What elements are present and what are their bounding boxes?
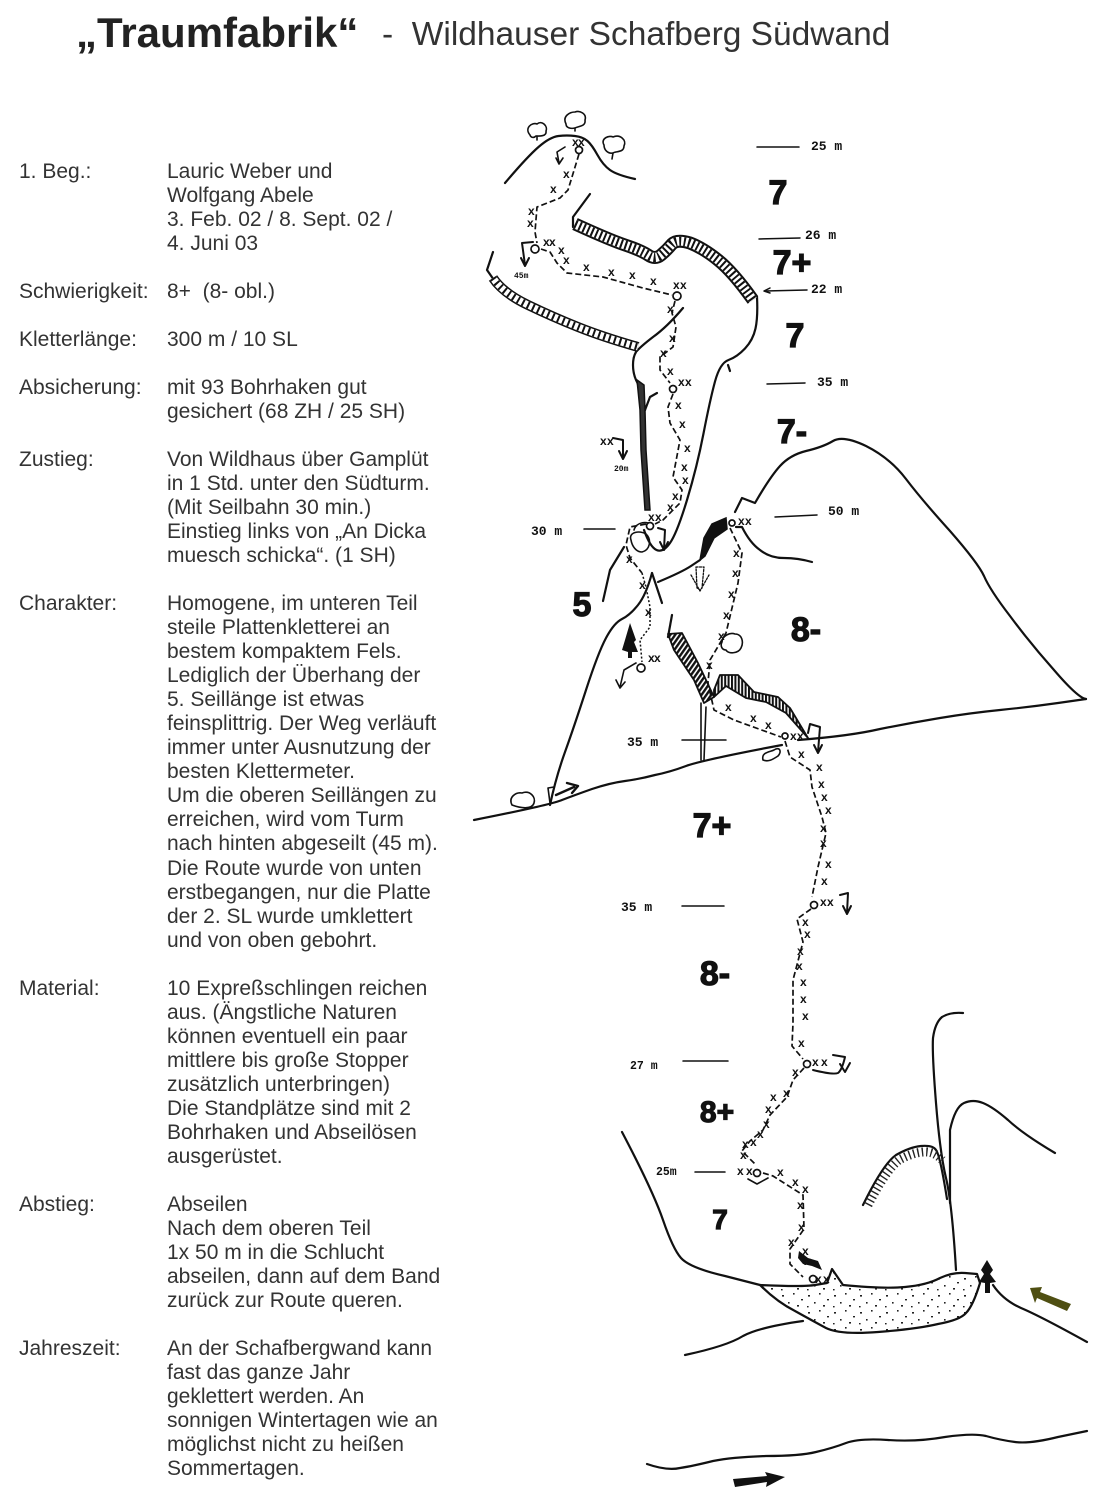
- bolts: xxxxxxxxx: [740, 1065, 799, 1162]
- bolts: xxxxxxxxxxxxxxxxxxxxx: [527, 167, 691, 514]
- text block: material: mittlere bis große Stopper: [167, 1049, 409, 1072]
- middle mountain and ledge: [474, 439, 1086, 820]
- text block: first ascent: Wolfgang Abele: [167, 184, 314, 207]
- text block: approach: [19, 448, 430, 567]
- text block: character: der 2. SL wurde umklettert: [167, 905, 412, 928]
- arrow: approach direction: [1030, 1287, 1071, 1311]
- text block: protection: Absicherung:: [19, 376, 142, 399]
- belays: [531, 146, 818, 1282]
- text block: descent: Nach dem oberen Teil: [167, 1217, 371, 1240]
- text block: character: nach hinten abgeseilt (45 m).: [167, 832, 438, 855]
- trees: [622, 623, 996, 1293]
- difficulty grades: 7: [786, 317, 804, 355]
- overhang bands, hatched: [493, 224, 753, 347]
- upper rock outlines: [487, 136, 757, 601]
- text block: season: Sommertagen.: [167, 1457, 305, 1480]
- dotted approach: [640, 573, 650, 662]
- lower wall outlines: [622, 1013, 1087, 1469]
- text block: character: immer unter Ausnutzung der: [167, 736, 431, 759]
- pitch length labels: 25 m: [811, 139, 842, 154]
- text block: character: feinsplittrig. Der Weg verläuft: [167, 712, 436, 735]
- lower overhang, hatched: [668, 633, 808, 738]
- text block: character: Um die oberen Seillängen zu: [167, 784, 437, 807]
- text block: approach: Zustieg:: [19, 448, 94, 471]
- bolts: xxxxxxxxxxxxx: [543, 135, 827, 1286]
- text block: character: [19, 592, 438, 952]
- text block: descent: [19, 1193, 440, 1312]
- text block: material: Bohrhaken und Abseilösen: [167, 1121, 417, 1144]
- text block: first ascent: 1. Beg.:: [19, 160, 91, 183]
- bolts: xxxxxxxxx: [798, 747, 832, 888]
- pitch length labels: 35 m: [621, 900, 652, 915]
- text block: character: steile Plattenkletterei an: [167, 616, 390, 639]
- text block: descent: abseilen, dann auf dem Band: [167, 1265, 440, 1288]
- text block: character: erstbegangen, nur die Platte: [167, 881, 431, 904]
- text block: protection: [19, 376, 405, 423]
- text block: difficulty: 8+ (8- obl.): [167, 280, 275, 303]
- summit bushes: [528, 111, 625, 159]
- difficulty grades: 8-: [700, 955, 730, 993]
- text block: first ascent: [19, 160, 392, 255]
- pitch length labels: 35 m: [817, 375, 848, 390]
- difficulty grades: 8-: [791, 611, 821, 649]
- text block: difficulty: Schwierigkeit:: [19, 280, 149, 303]
- text block: character: Lediglich der Überhang der: [167, 664, 420, 687]
- text block: difficulty: [19, 280, 275, 303]
- difficulty grades: 7+: [693, 807, 731, 845]
- bushes: [511, 523, 780, 808]
- text block: approach: (Mit Seilbahn 30 min.): [167, 496, 371, 519]
- text block: season: Jahreszeit:: [19, 1337, 121, 1360]
- black overhang at fifty metre belay: [700, 518, 727, 560]
- text block: first ascent: Lauric Weber und: [167, 160, 332, 183]
- pitch length labels: 26 m: [805, 228, 836, 243]
- text block: character: bestem kompaktem Fels.: [167, 640, 402, 663]
- text block: descent: zurück zur Route queren.: [167, 1289, 403, 1312]
- text block: climbing length: [19, 328, 298, 351]
- text block: material: 10 Expreßschlingen reichen: [167, 977, 427, 1000]
- subtitle: - Wildhauser Schafberg Südwand: [382, 16, 890, 53]
- bolts: xxxxxxxx: [777, 1165, 811, 1268]
- text block: material: [19, 977, 427, 1168]
- pillar below overhang: [701, 703, 706, 760]
- text block: character: Charakter:: [19, 592, 117, 615]
- pitch length labels: 35 m: [627, 735, 658, 750]
- pitch length labels: 50 m: [828, 504, 859, 519]
- text block: first ascent: 4. Juni 03: [167, 232, 258, 255]
- text block: season: sonnigen Wintertagen wie an: [167, 1409, 438, 1432]
- text block: character: Homogene, im unteren Teil: [167, 592, 418, 615]
- text block: approach: muesch schicka“. (1 SH): [167, 544, 396, 567]
- text block: material: ausgerüstet.: [167, 1145, 283, 1168]
- text block: material: Die Standplätze sind mit 2: [167, 1097, 411, 1120]
- text block: season: möglichst nicht zu heißen: [167, 1433, 404, 1456]
- difficulty grades: 7: [712, 1204, 728, 1235]
- text block: approach: Einstieg links von „An Dicka: [167, 520, 426, 543]
- bolts: xxxxxxxxxxxxx: [549, 135, 834, 1286]
- difficulty grades: 7-: [777, 413, 807, 451]
- text block: descent: 1x 50 m in die Schlucht: [167, 1241, 384, 1264]
- text block: first ascent: 3. Feb. 02 / 8. Sept. 02 /: [167, 208, 392, 231]
- text block: character: Die Route wurde von unten: [167, 857, 422, 880]
- difficulty grades: 7+: [773, 244, 811, 282]
- bolts: xxxxxxxx: [796, 915, 811, 1050]
- text block: material: Material:: [19, 977, 100, 1000]
- hatching under arc: [868, 1152, 942, 1205]
- text block: character: 5. Seillänge ist etwas: [167, 688, 364, 711]
- pitch length labels: 22 m: [811, 282, 842, 297]
- text block: protection: gesichert (68 ZH / 25 SH): [167, 400, 405, 423]
- pitch length labels: 45m: [514, 272, 529, 281]
- text block: character: und von oben gebohrt.: [167, 929, 377, 952]
- text block: material: aus. (Ängstliche Naturen: [167, 1001, 397, 1024]
- text block: protection: mit 93 Bohrhaken gut: [167, 376, 367, 399]
- text block: approach: Von Wildhaus über Gamplüt: [167, 448, 428, 471]
- pitch length labels: 30 m: [531, 524, 562, 539]
- pitch length labels: [514, 139, 859, 1179]
- text block: character: erreichen, wird vom Turm: [167, 808, 404, 831]
- pitch length labels: 20m: [614, 465, 629, 474]
- sandy scree cone: [760, 1269, 980, 1333]
- bolts: xxxxxxxxxxxx: [626, 546, 772, 732]
- text block: season: fast das ganze Jahr: [167, 1361, 350, 1384]
- pitch length labels: 27 m: [630, 1060, 658, 1073]
- text block: season: An der Schafbergwand kann: [167, 1337, 432, 1360]
- text block: material: können eventuell ein paar: [167, 1025, 408, 1048]
- difficulty grades: [573, 174, 821, 1235]
- dark chimney column: [637, 380, 650, 510]
- text block: approach: in 1 Std. unter den Südturm.: [167, 472, 430, 495]
- text block: season: geklettert werden. An: [167, 1385, 364, 1408]
- route line: [535, 154, 826, 1277]
- pitch length marks: [584, 147, 817, 1172]
- text block: season: [19, 1337, 438, 1480]
- difficulty grades: 8+: [700, 1096, 734, 1129]
- title: „Traumfabrik“: [76, 9, 358, 56]
- difficulty grades: 7: [769, 174, 787, 212]
- text block: climbing length: Kletterlänge:: [19, 328, 137, 351]
- text block: descent: Abstieg:: [19, 1193, 95, 1216]
- text block: descent: Abseilen: [167, 1193, 248, 1216]
- text block: climbing length: 300 m / 10 SL: [167, 328, 298, 351]
- text block: character: besten Klettermeter.: [167, 760, 355, 783]
- pitch length labels: 25m: [656, 1166, 677, 1179]
- rappel arrows: [521, 147, 851, 1184]
- arrow: base path direction: [733, 1472, 785, 1487]
- text block: material: zusätzlich unterbringen): [167, 1073, 390, 1096]
- difficulty grades: 5: [573, 586, 591, 624]
